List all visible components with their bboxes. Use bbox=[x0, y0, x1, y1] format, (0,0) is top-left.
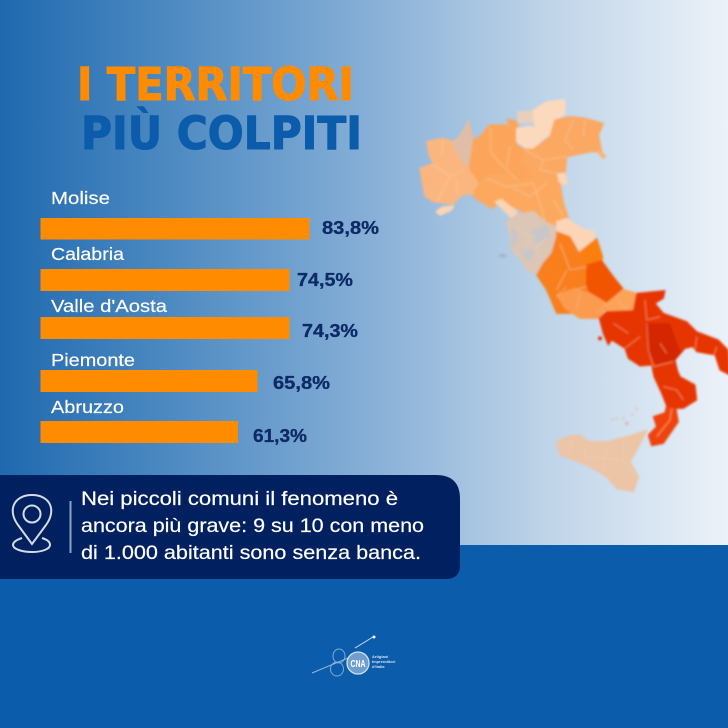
logo caption: d'Italia bbox=[372, 664, 385, 669]
Umbria and Lazio bbox=[537, 232, 603, 313]
callout panel bbox=[0, 475, 460, 579]
row: Abruzzo: Abruzzo bbox=[51, 397, 124, 417]
row: Piemonte: Piemonte bbox=[51, 350, 135, 370]
Emilia Romagna bbox=[473, 173, 568, 227]
southern peninsula silhouette bbox=[599, 291, 728, 446]
row: Valle d'Aosta: Valle d'Aosta bbox=[51, 296, 167, 316]
callout background bbox=[0, 475, 460, 579]
row: Piemonte: 65,8% bbox=[273, 372, 330, 393]
Friuli tip bbox=[597, 148, 607, 159]
swoosh bbox=[312, 658, 348, 673]
divider bbox=[70, 501, 72, 553]
Calabria south bbox=[648, 407, 678, 445]
row: Valle d'Aosta bbox=[40, 296, 358, 341]
row: Abruzzo bbox=[40, 397, 307, 446]
Sondrio tip bbox=[507, 118, 519, 133]
Veneto bbox=[522, 117, 603, 183]
title bbox=[77, 58, 362, 160]
logo caption: Artigiani bbox=[372, 654, 388, 659]
row: Calabria bbox=[40, 244, 353, 291]
Valle d'Aosta bbox=[453, 120, 473, 168]
number 8 bbox=[330, 649, 345, 676]
Aeolian islands bbox=[612, 408, 638, 425]
Basilicata bbox=[645, 323, 682, 365]
title line: I TERRITORI: I TERRITORI bbox=[77, 58, 354, 111]
Lombardia bbox=[469, 125, 533, 183]
row: Molise: Molise bbox=[51, 188, 110, 208]
row: Calabria: 74,5% bbox=[297, 269, 353, 290]
row: Abruzzo: 61,3% bbox=[253, 425, 307, 446]
callout text: ancora più grave: 9 su 10 con meno bbox=[81, 515, 424, 537]
bottom blue band bbox=[0, 545, 728, 728]
row: Piemonte bbox=[40, 350, 330, 393]
logo caption bbox=[372, 654, 395, 669]
Elba bbox=[499, 254, 507, 257]
Abruzzo south bbox=[587, 261, 633, 310]
Alto Adige upper grey bbox=[517, 110, 534, 123]
background gradient bbox=[0, 0, 728, 545]
callout text bbox=[81, 488, 424, 564]
south Lazio bbox=[557, 288, 607, 318]
logo: CNA 80 years bbox=[312, 636, 395, 676]
Piemonte bbox=[420, 138, 480, 204]
row: Molise: 83,8% bbox=[322, 217, 379, 238]
Abruzzo north bbox=[580, 238, 603, 265]
Polesine pale bbox=[557, 173, 568, 185]
Sicilia bbox=[557, 431, 647, 492]
logo caption: Imprenditori bbox=[372, 659, 395, 664]
row: Molise bbox=[40, 188, 379, 240]
row: Calabria: Calabria bbox=[51, 244, 124, 264]
icon: location pin bbox=[13, 495, 51, 552]
Campania point bbox=[598, 336, 602, 340]
row: Valle d'Aosta: 74,3% bbox=[302, 320, 358, 341]
Trentino Alto Adige bbox=[517, 99, 565, 149]
title line: PIÙ COLPITI: PIÙ COLPITI bbox=[81, 107, 362, 160]
northern and central regions bbox=[420, 99, 633, 313]
Marche bbox=[557, 218, 595, 252]
Toscana grey patches bbox=[512, 225, 550, 260]
southern regions bbox=[557, 287, 728, 492]
internal borders bbox=[557, 287, 717, 437]
CNA badge bbox=[347, 652, 369, 674]
Liguria bbox=[435, 205, 455, 216]
Toscana bbox=[507, 212, 557, 273]
callout text: di 1.000 abitanti sono senza banca. bbox=[81, 542, 421, 564]
callout text: Nei piccoli comuni il fenomeno è bbox=[81, 488, 398, 510]
map of Italy bbox=[420, 99, 728, 492]
internal borders bbox=[433, 120, 587, 290]
logo: CNA 80 years: CNA bbox=[350, 659, 366, 670]
bar chart: territories bbox=[40, 188, 379, 446]
Molise bbox=[605, 289, 637, 313]
